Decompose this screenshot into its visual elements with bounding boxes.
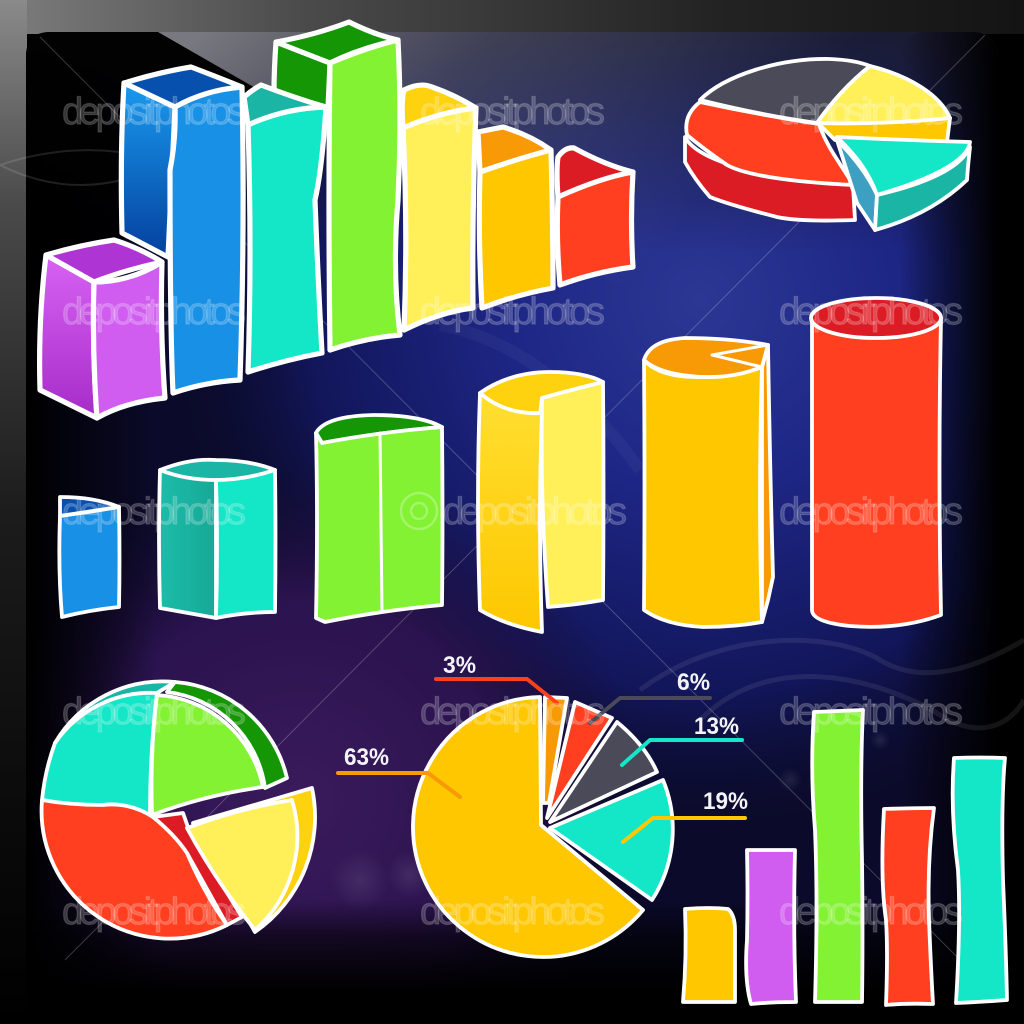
slice: gray [700, 59, 870, 123]
callout: 6% [590, 669, 710, 723]
slice: red [685, 102, 855, 221]
bar: yellow half cylinder [478, 372, 604, 632]
slice: yellow [817, 66, 950, 142]
callout: 6%: 6% [677, 669, 710, 696]
slice: 19% [550, 780, 673, 900]
callout: 19% [623, 788, 748, 842]
flat bar chart: bottom right [683, 710, 1007, 1005]
pie chart: bottom left, exploded [42, 681, 315, 939]
watermark text [62, 91, 963, 933]
slice: 63% [413, 697, 643, 957]
bar: yellow [683, 908, 735, 1002]
watermark text: depositphotos [779, 891, 963, 933]
watermark text: depositphotos [62, 891, 246, 933]
bar: red cylinder [811, 298, 941, 627]
watermark text: depositphotos [443, 491, 627, 533]
callout: 13% [622, 713, 742, 765]
bar: teal [159, 460, 276, 618]
bar: purple [40, 240, 165, 418]
slice: green [152, 682, 287, 815]
watermark text: depositphotos [779, 491, 963, 533]
slice: cyan, pulled out [837, 137, 970, 230]
bar: orange cylinder with notch [644, 338, 773, 627]
slice: 6% [547, 702, 612, 818]
callout: 3%: 3% [443, 652, 476, 679]
pie chart with percentage callouts [338, 652, 748, 957]
bar: purple [746, 850, 796, 1004]
slice: yellow, pulled out [187, 788, 315, 932]
watermark text: depositphotos [62, 491, 246, 533]
bar: green [812, 710, 863, 1002]
slice: 13% [550, 722, 657, 822]
bar: small blue [59, 497, 120, 617]
bar: yellow [402, 85, 476, 330]
bar: orange [478, 127, 553, 308]
slice: 3% [543, 697, 567, 803]
watermark text: depositphotos [779, 291, 963, 333]
watermark text: depositphotos [420, 291, 605, 333]
watermark text: depositphotos [779, 91, 963, 133]
slice: cyan [42, 681, 175, 815]
watermark text: depositphotos [420, 891, 605, 933]
callout: 13%: 13% [694, 713, 739, 740]
cylinder bar chart: middle row [59, 298, 941, 632]
watermark text: depositphotos [62, 691, 246, 733]
callout: 63% [338, 744, 460, 797]
bar: teal [244, 85, 326, 372]
bar: blue [121, 67, 243, 393]
slice: red [42, 800, 227, 939]
watermark text: depositphotos [420, 691, 605, 733]
bar: lime green [274, 22, 400, 350]
slice: dark red edge [153, 813, 242, 925]
watermark text: depositphotos [779, 691, 963, 733]
watermark text: depositphotos [62, 291, 246, 333]
callout: 3% [436, 652, 557, 703]
watermark text: depositphotos [62, 91, 246, 133]
bar: cyan [953, 758, 1007, 1003]
bar: red [882, 808, 934, 1005]
watermark text: depositphotos [420, 91, 605, 133]
bar: green [316, 415, 442, 622]
callout: 63%: 63% [344, 744, 389, 771]
callout: 19%: 19% [703, 788, 748, 815]
bar: red [557, 148, 633, 285]
3D pie chart: top right [685, 59, 970, 230]
3D bar chart: staggered row [40, 22, 633, 418]
